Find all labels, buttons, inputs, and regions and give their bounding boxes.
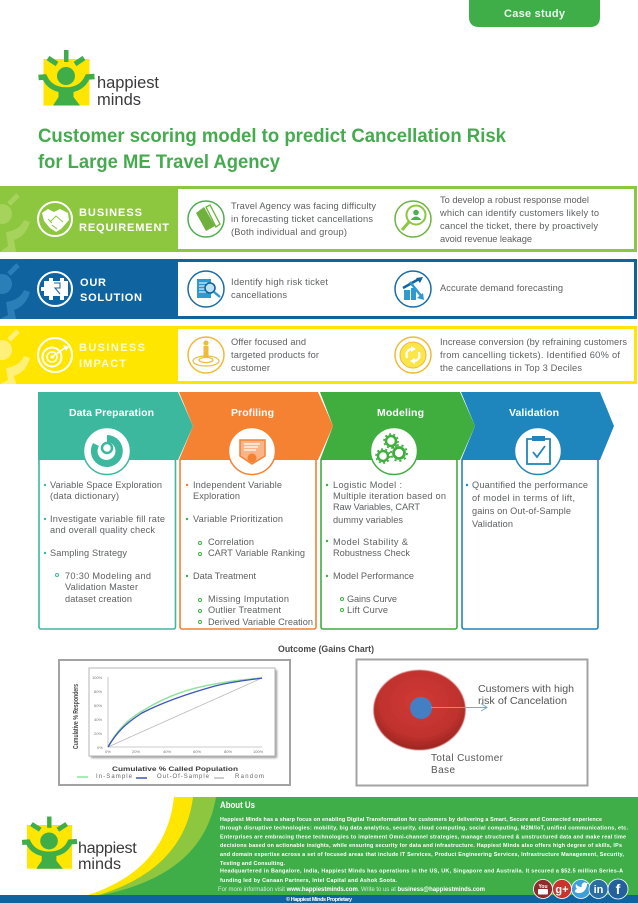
list: modeling: Gains Curve — [347, 594, 397, 604]
logo: happiest minds header — [38, 50, 159, 109]
chart: gains chart: Out-Of-Sample — [157, 774, 210, 780]
panel: modeling — [320, 392, 475, 629]
list: profiling: Derived Variable Creation — [208, 617, 313, 627]
list: profiling: CART Variable Ranking — [208, 548, 305, 558]
label: business requirement — [79, 207, 169, 234]
text: requirement left: (Both individual and group) — [231, 227, 347, 237]
text: about us: and domain expertise across a set of focused areas that include IT Services, Product Engineering Services, Infrastructure Management, Security, — [220, 852, 625, 858]
list: data preparation: Validation Master — [65, 582, 138, 592]
list: validation: Validation — [472, 519, 513, 529]
panel: validation — [461, 392, 614, 629]
label: business impact: BUSINESS — [79, 342, 145, 354]
icon: customer search — [395, 201, 431, 237]
text: impact right: the cancellations in Top 3 Deciles — [440, 363, 582, 373]
list: data preparation: dataset creation — [65, 594, 132, 604]
list: profiling: Variable Prioritization — [193, 514, 283, 524]
heading: about us: About Us — [220, 800, 255, 811]
chart: gains chart: 40% — [163, 749, 171, 754]
text: requirement right: cancel the ticket, there by proactively — [440, 221, 598, 231]
text: impact right: from cancelling tickets). Identified 60% of — [440, 350, 620, 360]
icon: youtube: You — [538, 884, 548, 890]
chart: customer base diagram: Customers with high — [478, 684, 574, 695]
list: data preparation: Variable Space Exploration — [50, 480, 162, 490]
label: business requirement: BUSINESS — [79, 207, 142, 219]
chart: gains chart: 60% — [193, 749, 201, 754]
icon: twitter — [572, 880, 590, 898]
list: modeling: Model Performance — [333, 571, 414, 581]
text: requirement right: which can identify customers likely to — [439, 208, 599, 218]
label: business impact: IMPACT — [79, 358, 126, 370]
list: profiling: Missing Imputation — [208, 594, 289, 604]
chart: gains chart: 80% — [224, 749, 232, 754]
text: requirement right — [439, 195, 599, 244]
panel: business requirement — [0, 186, 637, 252]
logo: happiest minds header: happiest — [97, 74, 159, 92]
icon: linkedin: in — [594, 884, 604, 896]
label: business requirement: REQUIREMENT — [79, 222, 169, 234]
list: modeling: Model Stability & — [333, 537, 408, 547]
text: about us: decisions based on actionable insights, while ensuring security for data and infrastructure. Happiest Minds also offers high degree of skills, IPs — [220, 843, 622, 849]
list: data preparation: and overall quality check — [50, 525, 155, 535]
list: modeling: Robustness Check — [333, 548, 410, 558]
panel: our solution — [0, 259, 637, 319]
heading: outcome: Outcome (Gains Chart) — [278, 644, 374, 654]
text: solution right: Accurate demand forecasting — [440, 283, 563, 293]
chart: customer base diagram: Total Customer — [431, 753, 504, 764]
list: validation: gains on Out-of-Sample — [472, 506, 571, 516]
chart: gains chart: 0% — [105, 749, 111, 754]
text: impact left: Offer focused and — [231, 337, 306, 347]
list: validation: of model in terms of lift, — [472, 493, 575, 503]
text: contact line: For more information visit www.happiestminds.com. Write to us at business@happiestminds.com — [218, 887, 485, 893]
list: modeling: dummy variables — [333, 515, 403, 525]
heading: profiling: Profiling — [231, 407, 274, 419]
text: requirement right: To develop a robust response model — [440, 195, 589, 205]
label: business impact — [79, 342, 145, 370]
icon: handshake — [38, 202, 72, 236]
list: profiling — [186, 480, 313, 627]
list: data preparation: 70:30 Modeling and — [65, 571, 151, 581]
icon: demand chart — [395, 271, 431, 307]
icon: conversion arrows — [395, 337, 431, 373]
panel: data preparation — [38, 392, 193, 629]
text: about us: Headquartered in Bangalore, India, Happiest Minds has operations in the US, UK, Singapore and Australia. It secured a $52.5 million Series-A — [220, 868, 623, 874]
icon: person on target — [188, 337, 224, 373]
text: solution left: Identify high risk ticket — [231, 277, 328, 287]
chart: gains chart: 100% — [92, 675, 103, 680]
title: for Large ME Travel Agency — [38, 152, 280, 173]
chart: customer base diagram: risk of Cancelation — [478, 696, 567, 707]
text: about us: Happiest Minds has a sharp focus on enabling Digital Transformation for customers by delivering a Smart, Secure and Connected experience — [220, 817, 602, 823]
list: data preparation — [44, 480, 165, 604]
text: impact right — [440, 337, 627, 373]
title — [38, 126, 506, 173]
logo: happiest minds header: minds — [97, 91, 141, 109]
chart: gains chart: In-Sample — [96, 774, 133, 780]
chart: gains chart: 20% — [132, 749, 140, 754]
list: profiling: Outlier Treatment — [208, 605, 281, 615]
text: requirement left — [231, 201, 376, 237]
case study tab — [469, 0, 600, 27]
title: Customer scoring model to predict Cancellation Risk — [38, 126, 506, 147]
list: profiling: Data Treatment — [193, 571, 256, 581]
list: validation: Quantified the performance — [472, 480, 588, 490]
logo: happiest minds footer: minds — [78, 856, 121, 873]
chart: gains chart: 0% — [97, 745, 103, 750]
heading: validation: Validation — [509, 407, 559, 419]
heading: data preparation: Data Preparation — [69, 407, 154, 419]
chart: gains chart: Random — [235, 774, 264, 780]
text: copyright: © Happiest Minds Proprietary — [286, 896, 353, 903]
icon: report with eye — [228, 428, 276, 474]
text: impact left — [231, 337, 319, 373]
text: solution left: cancellations — [231, 290, 287, 300]
chart: gains chart: 100% — [253, 749, 264, 754]
icon: google plus: g+ — [555, 884, 569, 896]
text: requirement right: avoid revenue leakage — [440, 234, 532, 244]
icon: data ring — [84, 428, 130, 474]
list: modeling: Raw Variables, CART — [333, 502, 420, 512]
list: profiling: Correlation — [208, 537, 254, 547]
footer band — [0, 797, 638, 903]
icon: tickets — [188, 201, 224, 237]
logo: happiest minds footer: happiest — [78, 840, 137, 857]
icon: gears — [370, 428, 418, 474]
text: about us: Enterprises are embracing these technologies to implement Omni-channel strategies, manage structured & unstructured data and make real time — [220, 834, 626, 840]
panel: business impact — [0, 326, 637, 384]
list: modeling — [326, 480, 446, 615]
text: impact left: targeted products for — [231, 350, 319, 360]
text: about us: funding led by Canaan Partners, Intel Capital and Ashok Soota. — [220, 878, 398, 884]
chart: gains chart: Cumulative % Responders — [73, 684, 80, 749]
text: impact left: customer — [231, 363, 270, 373]
chart: gains chart — [59, 660, 290, 785]
list: profiling: Exploration — [193, 491, 240, 501]
text: about us — [220, 817, 628, 884]
case study tab: Case study — [504, 8, 566, 20]
logo: happiest minds footer — [22, 817, 137, 873]
text: impact right: Increase conversion (by refraining customers — [440, 337, 627, 347]
label: our solution — [80, 277, 142, 304]
chart: customer base diagram — [356, 660, 588, 786]
chart: gains chart: 40% — [94, 717, 102, 722]
list: data preparation: (data dictionary) — [50, 491, 119, 501]
label: our solution: OUR — [80, 277, 106, 289]
list: data preparation: Sampling Strategy — [50, 548, 127, 558]
panel: profiling — [179, 392, 333, 629]
text: solution left — [231, 277, 328, 300]
label: our solution: SOLUTION — [80, 292, 142, 304]
list: modeling: Logistic Model : — [333, 480, 402, 490]
icon: target — [38, 338, 72, 372]
text: requirement left: Travel Agency was facing difficulty — [231, 201, 376, 211]
chart: gains chart: 20% — [94, 731, 102, 736]
list: modeling: Multiple iteration based on — [333, 491, 446, 501]
text: requirement left: in forecasting ticket cancellations — [231, 214, 373, 224]
icon: facebook: f — [616, 881, 621, 897]
list: data preparation: Investigate variable fill rate — [50, 514, 165, 524]
list: profiling: Independent Variable — [193, 480, 282, 490]
list: modeling: Lift Curve — [347, 605, 388, 615]
icon: document search — [188, 271, 224, 307]
chart: gains chart: 80% — [94, 689, 102, 694]
social icons — [534, 879, 628, 899]
text: about us: Testing and Consulting. — [220, 861, 286, 867]
chart: customer base diagram: Base — [431, 765, 455, 776]
chart: gains chart: Cumulative % Called Population — [112, 766, 238, 773]
icon: clipboard check — [514, 428, 562, 474]
heading: modeling: Modeling — [377, 407, 424, 419]
chart: gains chart: 60% — [94, 703, 102, 708]
text: about us: through disruptive technologies: mobility, big data analytics, security, cloud computing, social computing, M2M/IoT, unified communications, etc. — [220, 826, 628, 832]
list: validation — [466, 480, 588, 529]
icon: puzzle — [38, 272, 72, 306]
